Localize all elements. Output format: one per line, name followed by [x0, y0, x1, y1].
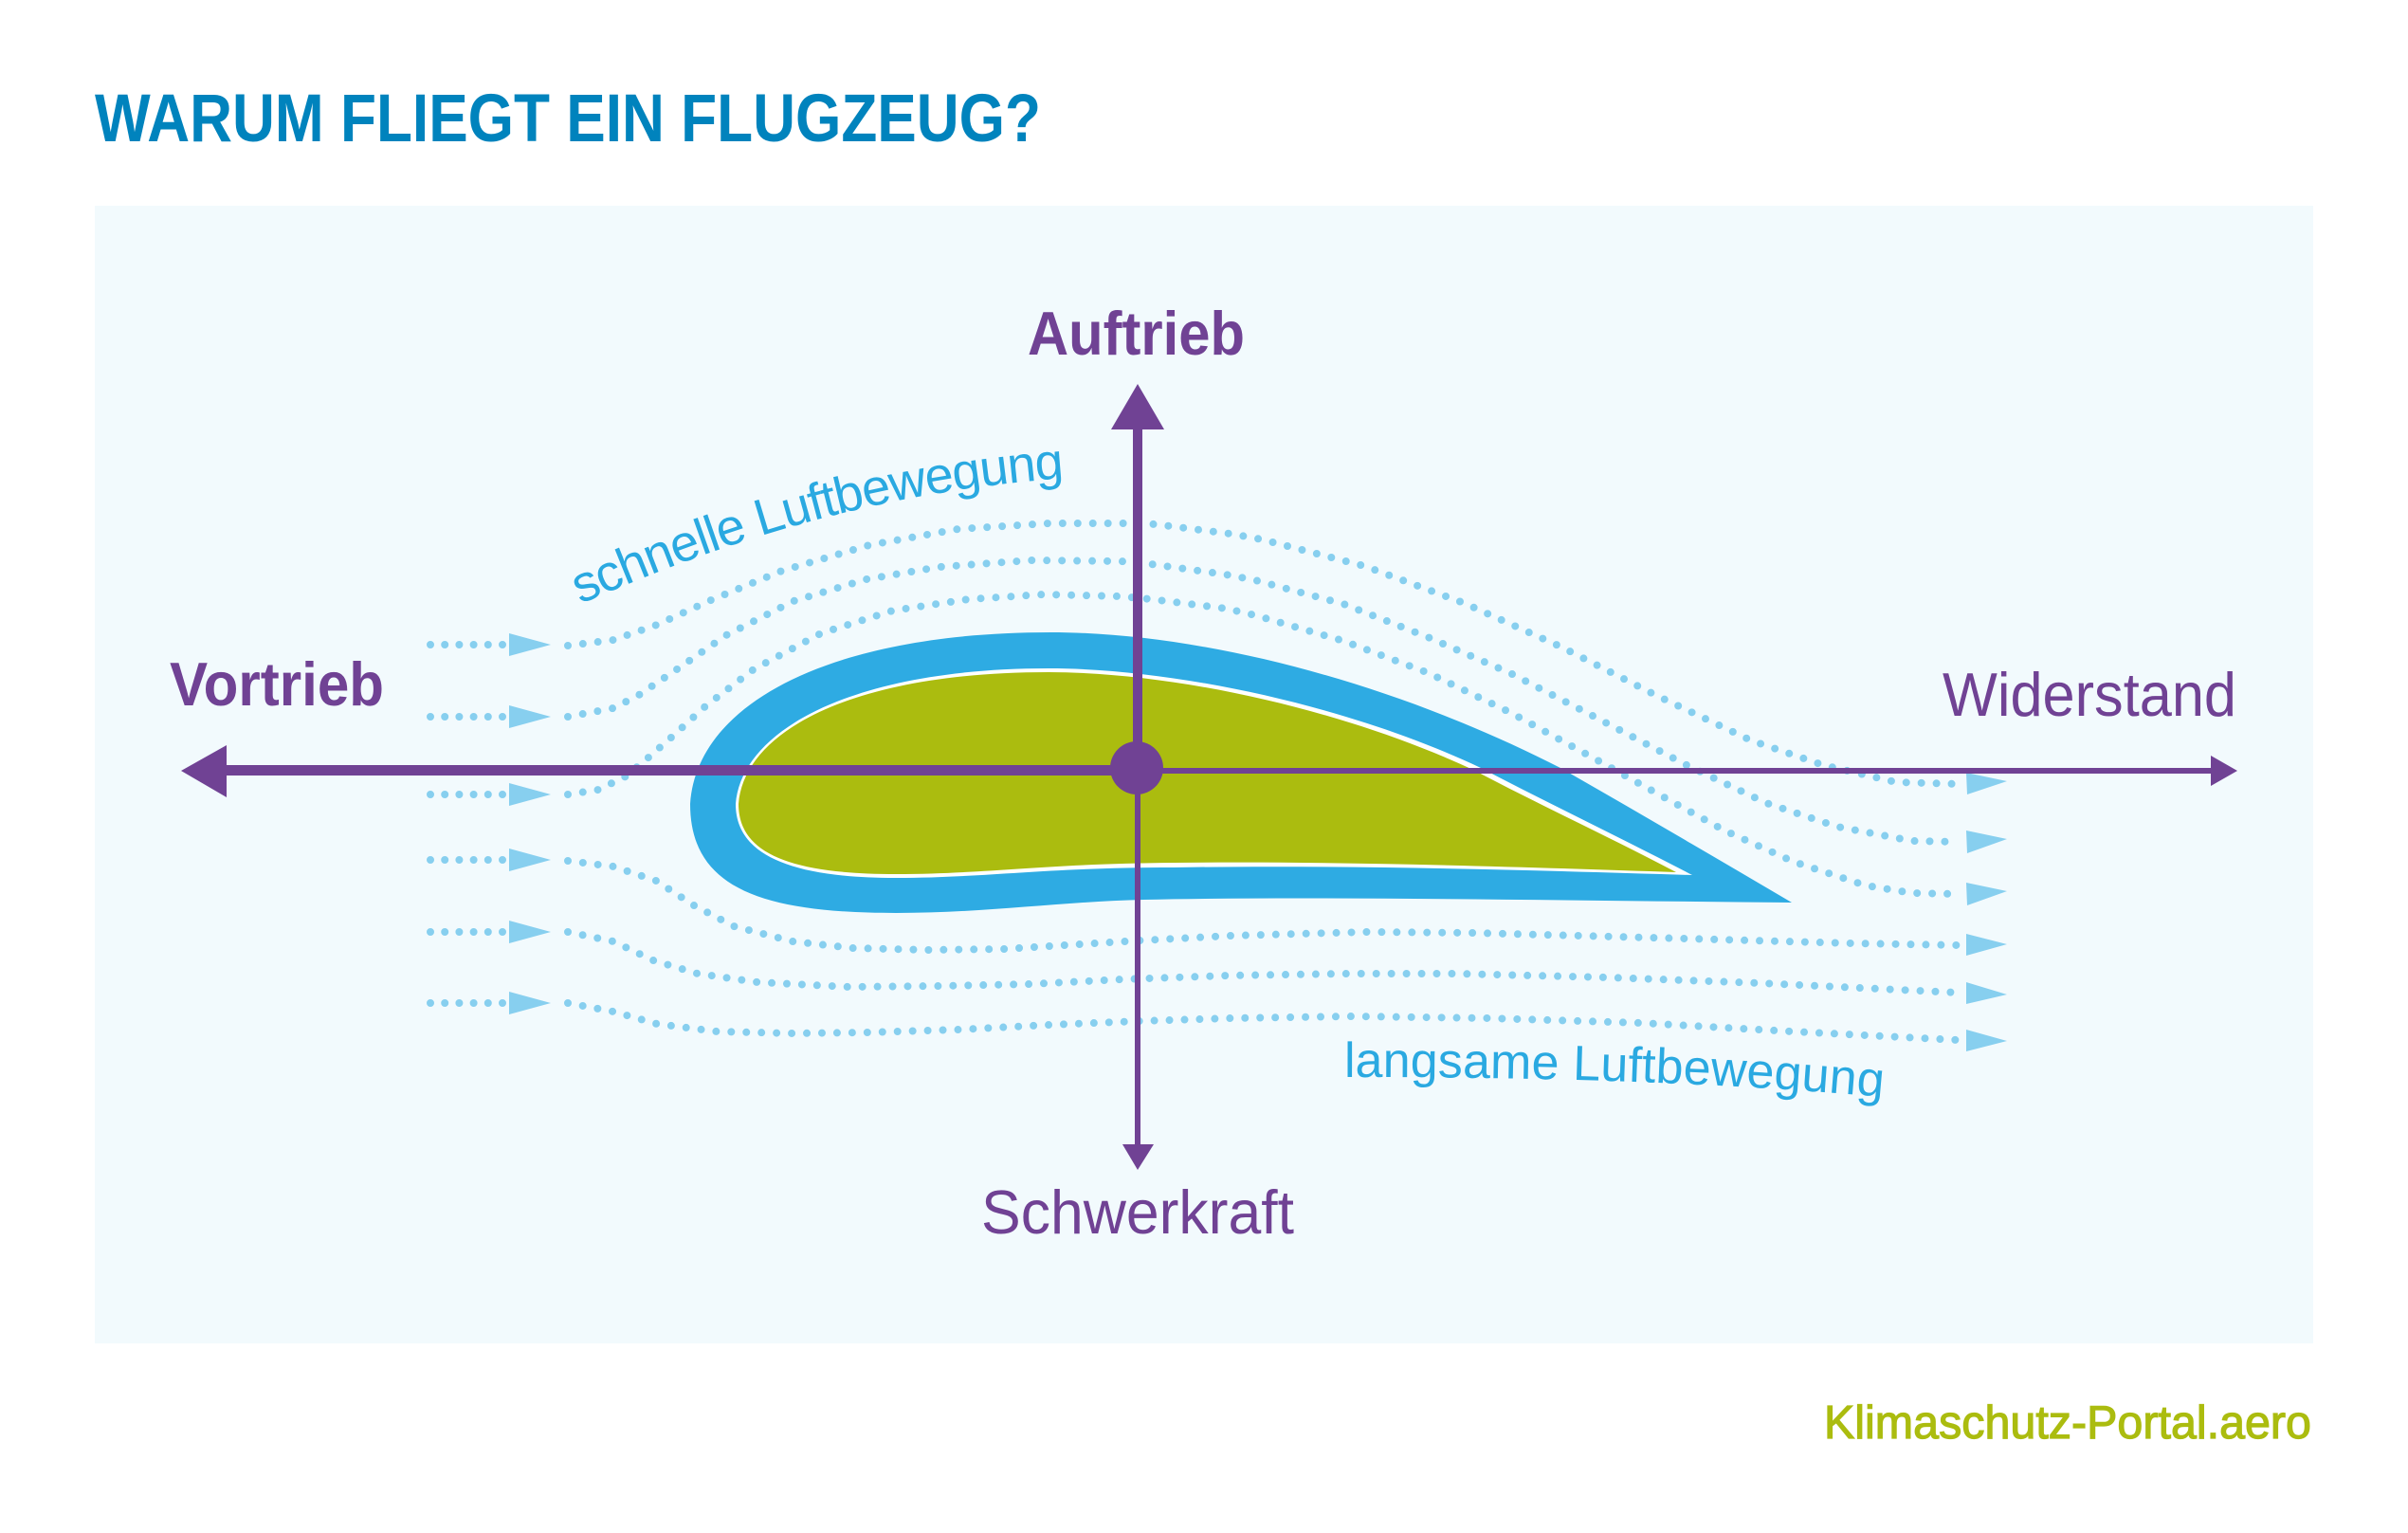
- label: langsame Luftbewegung: langsame Luftbewegung: [1348, 1041, 1883, 1106]
- airfoil: green wing profile: [739, 672, 1676, 874]
- airflow: outgoing arrowheads: [1966, 773, 2007, 1051]
- label: schnelle Luftbewegung: schnelle Luftbewegung: [575, 451, 1062, 601]
- airflow: fast streamlines above the wing: [568, 523, 1958, 894]
- label: Auftrieb: Auftrieb: [1028, 299, 1245, 368]
- label: Schwerkraft: Schwerkraft: [981, 1177, 1294, 1247]
- label: Widerstand: Widerstand: [1943, 660, 2236, 729]
- airfoil: white outline: [736, 668, 1692, 878]
- source credit: Klimaschutz-Portal.aero: [1824, 1397, 2311, 1449]
- arrow: Widerstand (right): [1138, 756, 2237, 786]
- panel: diagram background: [95, 206, 2313, 1343]
- arrow: Vortrieb (left): [181, 745, 1138, 797]
- center point of forces: [1110, 741, 1163, 794]
- airfoil: blue outer airflow layer: [690, 632, 1792, 913]
- airflow: incoming dotted lines and arrows: [430, 633, 551, 1014]
- arrow: Schwerkraft (down): [1122, 768, 1154, 1170]
- arrow: Auftrieb (up): [1111, 384, 1164, 768]
- label: Vortrieb: Vortrieb: [170, 649, 384, 719]
- airflow: slow streamlines below the wing: [568, 861, 1958, 1040]
- title: WARUM FLIEGT EIN FLUGZEUG?: [95, 82, 1041, 156]
